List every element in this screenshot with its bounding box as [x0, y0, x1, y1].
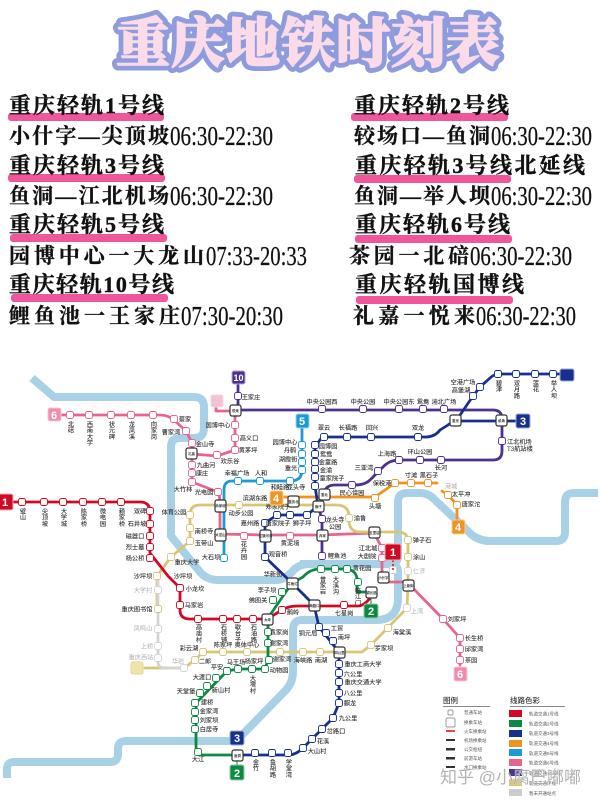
line 6 pink: 曹家湾 — [162, 428, 180, 436]
line 3 navy: 嘉州路 — [241, 520, 260, 528]
loop line tan: 奥体中心 — [235, 641, 260, 649]
badge line 6 left — [48, 408, 61, 422]
line 3 navy: 空港广场 — [451, 378, 475, 386]
interchange stations: 冉家坝 — [215, 503, 226, 508]
interchange stations: 红旗河沟 — [259, 533, 273, 538]
line 10 purple: 三亚湾 — [355, 464, 373, 472]
line 4 orange — [283, 472, 480, 520]
line 10 purple: 王家庄 — [242, 394, 260, 402]
line 3 navy: 观音桥 — [269, 550, 288, 558]
line number badges — [0, 369, 574, 780]
loop line tan: 彩云湖 — [180, 644, 198, 652]
legend: line colours — [509, 695, 565, 797]
line 2 green: 佛图关 — [249, 596, 267, 604]
badge loop line — [131, 662, 158, 674]
line 3 navy: 郑家院子 — [266, 503, 290, 511]
loop line tan: 罗家坝 — [375, 644, 393, 652]
badge line 5: 5 — [299, 416, 305, 428]
line 3 navy: 唐家院子 — [266, 520, 290, 528]
line 3 navy: 高堡湖 — [452, 386, 470, 394]
line 1 schedule: 小什字—尖顶坡 — [9, 124, 169, 148]
badge line 6 right: 6 — [457, 669, 463, 681]
line 6 pink: 邱家湾 — [465, 646, 483, 654]
line 2 green: 临江门 — [354, 586, 361, 607]
badge line 1 north — [385, 544, 401, 560]
line 3 navy: 麒龙 — [344, 700, 356, 708]
line 6 pink: 金山寺 — [196, 440, 214, 448]
line 6 pink: 蔡家 — [179, 416, 191, 424]
legend: line colours: 轨道交通2号线 — [529, 720, 559, 728]
line 3 navy: 回兴 — [366, 424, 378, 432]
interchange stations: 大龙山 — [215, 532, 226, 537]
line 3 north extension schedule: 鱼洞—举人坝 — [354, 184, 492, 208]
line 10 purple: 中央公园西 — [307, 398, 337, 406]
line 4 orange: 黑石子 — [420, 472, 438, 480]
line 6 pink: 光电园 — [195, 488, 213, 496]
line 6 schedule: 06:30-22:30 — [470, 241, 572, 271]
loop line tan: 仁济 — [413, 568, 426, 576]
loop line tan: 南湖 — [315, 656, 327, 664]
badge line 4 right: 4 — [455, 522, 462, 534]
line 3 navy: 鸳鸯 — [320, 450, 332, 458]
line 2 green: 白居寺 — [200, 726, 218, 734]
interchange stations: 四公里 — [334, 650, 345, 655]
metro map — [0, 369, 598, 797]
loop line tan: 海峡路 — [294, 656, 313, 664]
interchange stations: 小什字 — [378, 575, 389, 580]
interchange stations — [186, 405, 507, 761]
line 5 blue: 大石坝 — [202, 554, 220, 562]
line 10 purple: 江北机场 — [507, 438, 532, 446]
line 10 schedule: 重庆轻轨10号线 — [9, 272, 174, 297]
line 5 blue: 丹鹤 — [284, 446, 296, 454]
line 1 red: 高庙村 — [194, 623, 202, 644]
interchange stations: 两路口 — [309, 603, 320, 608]
loop line tan: 海棠溪 — [393, 628, 411, 636]
line 1 red: 马家岩 — [185, 602, 203, 610]
interchange stations: 大坪 — [264, 617, 271, 622]
line 6 pink: 江北城 — [359, 544, 378, 552]
line 3 navy: 八公里 — [344, 690, 362, 698]
line 6 pink: 状元碑 — [108, 420, 115, 441]
line 3 navy: 南坪 — [338, 634, 350, 642]
line 10 purple: 公园 — [329, 524, 341, 531]
line 4 orange: 寸滩 — [405, 472, 417, 480]
legend: station symbols: 火车换乘站 — [464, 728, 487, 735]
line 10 purple: 中央公园 — [351, 398, 375, 406]
legend: station symbols: 前游车站 — [464, 755, 482, 762]
line 1 schedule — [8, 93, 273, 151]
schedule panel — [8, 93, 592, 331]
interchange stations: 重北 — [321, 492, 328, 497]
line 2 schedule — [351, 93, 592, 151]
line 6 pink: 长生桥 — [465, 634, 484, 642]
badge line 4 left: 4 — [273, 493, 280, 505]
line 6 pink: 康庄 — [196, 470, 208, 478]
line 5 schedule: 重庆轻轨5号线 — [9, 212, 164, 237]
interchange stations: 礼嘉 — [188, 451, 195, 456]
line 1 red: 尖顶坡 — [40, 507, 48, 528]
loop line tan: 动步公园 — [229, 510, 253, 518]
line 10 purple: 鸳鸯 — [417, 398, 429, 406]
line 4 orange: 头塘 — [369, 502, 381, 510]
line 10 purple: 中央公园东 — [384, 398, 414, 406]
line 6 pink: 黄茅坪 — [239, 446, 257, 454]
legend: station symbols: 普通车站 — [464, 709, 482, 716]
interchange stations: 狮子 — [315, 504, 322, 509]
line 10 purple: 鲤鱼池 — [328, 552, 346, 560]
line 6 pink: 刘家坪 — [448, 616, 466, 624]
loop line tan: 沙坪坝 — [134, 572, 152, 580]
loop line tan: 上湾 — [411, 608, 423, 616]
badge line 6 left: 6 — [51, 410, 57, 422]
line 3 navy: 双月路 — [512, 380, 520, 400]
badge line 10 — [232, 371, 245, 392]
loop line tan: 南桥寺 — [195, 528, 213, 536]
line 3 navy: 金竹 — [252, 758, 259, 773]
line 1 red: 沙坪坝 — [174, 572, 192, 580]
line 3 schedule — [8, 153, 273, 211]
line 1 red: 陈家桥 — [80, 507, 87, 528]
line 6 pink — [62, 406, 484, 665]
line 6 pink: 大剧院 — [358, 552, 377, 560]
line 6 pink: 向家岗 — [150, 420, 157, 440]
line 3 navy: 鱼胡路 — [268, 758, 276, 779]
line 1 red: 七星岗 — [335, 610, 353, 618]
line 4 orange: 保税港 — [373, 480, 392, 488]
line 2 green: 谢家湾 — [270, 640, 288, 648]
line 1 red: 磁器口 — [126, 532, 144, 540]
line 3 navy: 花溪 — [317, 738, 329, 746]
badge line 2 bottom: 2 — [234, 768, 240, 780]
legend: line colours: 轨道交通环线 — [529, 780, 556, 787]
loop line tan: 体育公园 — [162, 508, 186, 516]
line 10 purple: T3航站楼 — [507, 445, 533, 453]
interchange stations: 重庆北 — [288, 499, 299, 504]
interchange stations: 铜元局 — [366, 590, 377, 595]
interchange stations: 悦来 — [232, 408, 239, 413]
badge loop airport link — [211, 395, 223, 407]
line 10 purple — [234, 385, 533, 560]
line 10 schedule: 鲤鱼池一王家庄 — [9, 304, 180, 328]
watermark: 知乎 @小腐巴嘟嘟 — [440, 768, 581, 787]
line 3 north extension schedule: 重庆轻轨3号线北延线 — [355, 153, 585, 178]
legend: line colours: 轨道交通10号线 — [529, 770, 562, 777]
legend: line colours: 暂未开通站点 — [529, 790, 556, 797]
line 6 pink: 龙凤溪 — [128, 420, 135, 441]
legend: station symbols: 换乘车站 — [464, 719, 482, 726]
line 3 navy: 工贸 — [331, 624, 343, 632]
loop line tan: 凤鸣山 — [134, 624, 152, 632]
loop line tan: 涂山 — [413, 554, 425, 562]
line 2 green — [177, 564, 371, 764]
line 4 orange: 太平冲 — [452, 490, 470, 498]
line 1 red: 小龙坎 — [186, 585, 204, 593]
interchange stations: 冉家 — [319, 533, 326, 538]
line 1 red: 璧山 — [18, 507, 26, 522]
legend: line colours: 轨道交通5号线 — [529, 750, 559, 757]
line 6 pink: 欢乐谷 — [221, 458, 239, 466]
legend: line colours: 轨道交通1号线 — [529, 710, 559, 718]
line 2 green: 大渡口 — [193, 674, 211, 682]
line 2 green: 大江 — [192, 756, 204, 764]
loop line tan: 弹子石 — [413, 536, 431, 544]
line 2 green: 马王场 — [227, 658, 245, 666]
line 5 blue — [202, 428, 306, 562]
line 1 red: 赖家桥 — [118, 507, 125, 528]
line 2 green: 大溪沟 — [332, 575, 339, 596]
interchange stations: 上新街 — [403, 583, 414, 588]
line 6 pink: 大竹林 — [174, 486, 193, 494]
line 10 purple: 上海路 — [378, 450, 397, 458]
loop line tan: 上桥 — [141, 642, 154, 650]
line 1 red: 石井坡 — [128, 520, 147, 528]
line 2 green: 新山村 — [212, 686, 230, 694]
line 4 orange: 龙头寺 — [287, 484, 305, 492]
line 5 blue: 幸福广场 — [225, 470, 249, 478]
line 5 blue: 重光 — [285, 464, 297, 472]
line 1 red: 石油路 — [250, 624, 257, 644]
loop line tan: 陈家坪 — [214, 641, 232, 649]
line 6 pink: 九曲河 — [197, 462, 215, 470]
badge line 1 north: 1 — [390, 547, 396, 559]
line 1 red: 烈士墓 — [126, 544, 145, 552]
legend: station symbols: 公交枢纽 — [464, 746, 482, 753]
line 3 navy: 九公里 — [339, 714, 357, 722]
badge line 4 right — [452, 520, 465, 534]
loop line schedule: 重庆轻轨国博线 — [355, 272, 524, 297]
line 2 green: 建桥 — [201, 698, 214, 706]
badge line 3 right — [516, 414, 530, 428]
line 6 schedule — [349, 212, 572, 271]
line 10 purple: 民心佳园 — [340, 489, 364, 497]
line 6 schedule: 茶园一北碚 — [349, 244, 469, 268]
legend: line colours: 轨道交通6号线 — [529, 760, 559, 766]
line 2 green: 天堂堡 — [177, 688, 195, 696]
badge line 3 bottom — [230, 731, 244, 745]
legend — [443, 695, 565, 797]
loop line tan: 重庆西站 — [129, 654, 153, 662]
line 3 schedule: 重庆轻轨3号线 — [9, 153, 164, 178]
line 1 red: 双碑 — [134, 508, 146, 516]
line 6 pink: 黄泥塝 — [281, 540, 299, 548]
legend: station symbols: 水门换乘站 — [464, 764, 487, 771]
line 6 pink: 西南大学 — [86, 421, 93, 446]
line 1 schedule: 06:30-22:30 — [170, 121, 273, 151]
line 3 navy: 铜元局 — [299, 630, 317, 638]
title: 重庆地铁时刻表 — [116, 1, 500, 78]
badge line 6 right — [454, 667, 467, 681]
badge line 2 mid: 2 — [368, 606, 374, 618]
line 2 green: 杨家坪 — [245, 658, 263, 666]
line 3 navy: 大山村 — [308, 748, 326, 756]
line 3 navy: 双龙 — [412, 424, 424, 432]
line 10 schedule — [9, 272, 283, 331]
badge line 3 bottom: 3 — [234, 733, 240, 745]
line 1 red — [14, 498, 393, 644]
loop line tan: 重庆大学 — [175, 558, 199, 566]
line 1 red: 歇台子 — [234, 623, 241, 644]
interchange stations: 机场 — [498, 418, 505, 423]
line 10 purple: 长河 — [435, 464, 447, 472]
line 5 blue: 湖霞街 — [279, 456, 297, 464]
line 2 green: 金家湾 — [200, 708, 218, 716]
interchange stations: 五里店 — [369, 530, 380, 535]
loop line tan: 华岩 — [172, 658, 184, 666]
badge line 1: 1 — [2, 497, 8, 509]
legend: station symbols: 图例 — [443, 695, 458, 705]
line 3 schedule: 鱼洞—江北机场 — [9, 184, 169, 208]
line 3 navy: 六公里 — [344, 670, 362, 678]
interchange stations: 重光 — [452, 418, 459, 423]
line 3 north extension schedule — [354, 153, 592, 211]
line 5 blue: 和睦路 — [271, 484, 290, 492]
badge line 2 mid — [364, 598, 378, 618]
line 2 green: 刘家坝 — [200, 716, 218, 724]
interchange stations: 鱼洞 — [234, 753, 241, 758]
loop line tan: 渝鲁 — [354, 514, 366, 522]
line 3 navy: 华新街 — [264, 570, 282, 578]
line 5 schedule: 07:33-20:33 — [206, 241, 307, 271]
line 3 navy: 碧津 — [494, 379, 502, 394]
line 10 schedule: 07:30-20:30 — [181, 301, 283, 331]
line 3 navy: 学堂湾 — [284, 758, 292, 779]
badge line 3 terminal — [560, 369, 574, 381]
line 3 navy: 举人坝 — [550, 379, 557, 400]
line 2 schedule: 较场口—鱼洞 — [354, 124, 490, 148]
badge line 4 left — [270, 491, 283, 505]
line 3 navy: 童家院子 — [320, 474, 344, 482]
loop line schedule — [353, 272, 576, 331]
line 3 navy: 重庆工商大学 — [344, 660, 382, 668]
line 3 navy: 莲花 — [532, 379, 539, 394]
line 1 red: 鹅岭 — [287, 608, 299, 616]
loop line tan — [122, 494, 431, 672]
line 2 green: 李子坝 — [258, 586, 276, 594]
line 10 purple: 渝北广场 — [432, 398, 456, 406]
line 6 pink: 北碚 — [66, 420, 74, 435]
loop line tan: 谢家湾 — [273, 656, 291, 664]
legend: line colours: 轨道交通4号线 — [529, 740, 559, 747]
badge line 10: 10 — [233, 373, 244, 383]
line 3 navy — [237, 370, 560, 779]
line 1 red: 大学城 — [60, 507, 67, 528]
line 3 navy: 狮子坪 — [293, 520, 311, 528]
line 2 green: 黄花园 — [353, 564, 371, 572]
line 4 orange: 唐家沱 — [462, 500, 480, 508]
legend: line colours: 轨道交通3号线 — [529, 730, 559, 737]
line 6 pink: 国博中心 — [206, 422, 231, 430]
line 2 green: 袁家岗 — [270, 628, 288, 636]
line 3 navy: 园博园 — [319, 442, 337, 450]
line 1 red: 微电园 — [98, 507, 106, 528]
loop line schedule: 礼嘉一悦来 — [353, 304, 475, 328]
line 3 navy: 岔路口 — [327, 728, 345, 736]
line 10 purple: 环山公园 — [408, 448, 432, 456]
loop line tan: 重庆图书馆 — [122, 606, 152, 614]
loop line tan: 大学村 — [134, 586, 152, 594]
line 2 schedule: 重庆轻轨2号线 — [354, 93, 509, 118]
line 1 red: 杨公桥 — [126, 554, 145, 562]
legend: line colours: 线路色彩 — [510, 695, 540, 705]
line 6 pink: 高义口 — [240, 434, 258, 442]
line 5 schedule: 园博中心一大龙山 — [9, 244, 204, 268]
line 6 pink: 茶园 — [465, 656, 477, 664]
line 5 schedule — [9, 212, 307, 271]
line 4 orange: 港城 — [445, 482, 458, 490]
line 1 red: 石桥铺 — [220, 624, 227, 644]
line 3 navy: 长福路 — [339, 424, 358, 432]
line 2 green: 动物园 — [270, 666, 288, 674]
line 3 navy: 翠云 — [318, 425, 330, 432]
line 3 navy: 重庆交通大学 — [344, 678, 382, 686]
badge line 2 bottom — [230, 760, 244, 780]
interchange stations: 牛角沱 — [287, 581, 298, 586]
line 6 schedule: 重庆轻轨6号线 — [355, 212, 510, 237]
line 3 navy: 金渝 — [320, 466, 333, 474]
legend: station symbols: 机场换乘站 — [464, 737, 487, 744]
line 2 green: 平安 — [211, 664, 223, 672]
line 10 purple: 龙头寺 — [326, 516, 344, 524]
badge line 1 — [0, 494, 13, 510]
line 3 navy: 金童路 — [319, 458, 338, 466]
loop line tan: 玉带山 — [195, 540, 213, 548]
badge line 5 — [296, 414, 309, 428]
line 6 pink: 花卉园 — [240, 540, 247, 561]
loop line tan: 二郎 — [199, 658, 211, 666]
rivers — [7, 378, 598, 778]
line 2 green: 曾家岩 — [318, 575, 326, 596]
line 5 blue: 园博中心 — [273, 438, 298, 446]
badge line 3 right: 3 — [520, 416, 526, 428]
loop line tan: 滨湖东路 — [243, 494, 268, 502]
line 5 blue: 人和 — [255, 470, 267, 478]
legend: station symbols — [443, 695, 490, 771]
line 3 schedule: 06:30-22:30 — [170, 181, 273, 211]
line 2 green: 大堰村 — [248, 674, 256, 695]
title: 重庆地铁时刻表 — [116, 1, 500, 78]
line 1 schedule: 重庆轻轨1号线 — [9, 93, 164, 118]
